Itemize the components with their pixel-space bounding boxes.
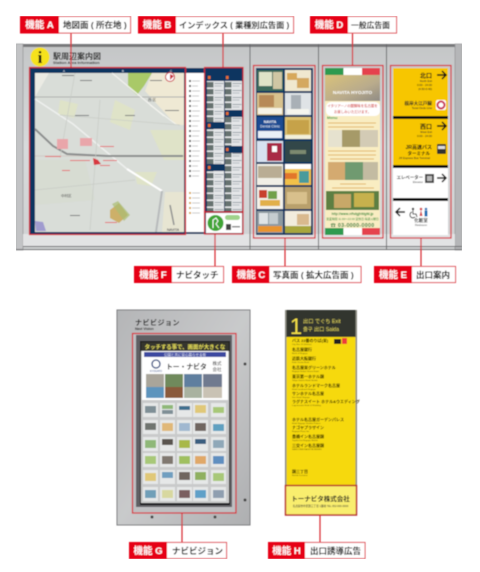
north exit — [417, 71, 446, 91]
highlight: navi touch frame — [204, 212, 243, 234]
exit sign destinations: Hotel Landmark Nagoya — [292, 388, 316, 391]
panel: general ad: イタリアーノの醍醐味を名古屋を — [327, 103, 378, 108]
west exit: 0:00 - 24:00 — [417, 134, 432, 138]
exit sign destinations: バス 22番のりば(栄) — [292, 337, 329, 343]
panel: area map: A — [63, 69, 65, 73]
exit sign destinations: Nagoya Sakae Green Hotel — [292, 370, 319, 373]
panel: exit sign — [285, 310, 360, 515]
north exit: 北口 — [420, 72, 432, 80]
exit sign destinations: Toyoko Inn Nagoya Nishiki — [292, 440, 318, 442]
subway line: 根岸大江戸線 — [404, 100, 432, 107]
elevator: Elevator — [413, 180, 423, 184]
exit sign destinations: 名古屋銀行 — [292, 346, 312, 352]
exit sign destinations: 東京第一ホテル錦 — [292, 373, 324, 379]
screen: navi vision display: タッチする事で、画面が大きくな — [145, 343, 226, 351]
highlight: index frame — [204, 68, 243, 212]
ad: To-Navita: トー・ナビタ — [166, 362, 207, 371]
exit sign destinations: サンホテル名古屋 — [292, 390, 324, 396]
elevator — [397, 174, 446, 184]
callout: feature C: 機能 C — [237, 269, 265, 281]
exit sign destinations: 豊橋イン名古屋錦 — [292, 433, 324, 439]
exit sign destinations: Lagunasuite Hotel & Wedding — [292, 404, 322, 407]
callout: feature B: 機能 B — [143, 19, 171, 31]
restroom — [396, 208, 428, 227]
exit sign destinations: Tokyo Daiichi Hotel Nishiki — [292, 379, 318, 382]
exit sign header: 出口 でぐち Exit — [303, 317, 341, 325]
heading: station area map: 駅周辺案内図 — [53, 51, 101, 61]
callout: feature B — [138, 16, 294, 67]
callout: feature C: 写真面 ( 拡大広告面 ) — [273, 270, 354, 280]
ad: To-Navita: 公園と共に安心暮らせる街 — [164, 352, 206, 357]
panel: exit guide — [393, 68, 448, 235]
callout: feature F: 機能 F — [139, 269, 167, 281]
highlight: navi vision frame — [132, 334, 236, 513]
panel: photo ads: NAVITA — [264, 120, 277, 124]
exit sign destinations — [292, 337, 360, 477]
panel: photo ads — [256, 68, 313, 235]
callout: feature H: 機能 H — [272, 545, 301, 557]
icon: information — [30, 48, 50, 67]
north exit: 0:00 - 24:00 — [417, 83, 432, 87]
panel: area map: 西 区 — [148, 98, 156, 102]
callout: feature F — [134, 234, 224, 283]
ad: To-Navita: KYOUATO — [150, 370, 162, 373]
panel: area map: C — [170, 69, 172, 73]
exit sign header: 1 — [290, 314, 302, 339]
exit sign destinations: Sun Hotel Nagoya — [292, 396, 311, 399]
north exit: (4:50-0:40) — [418, 87, 432, 91]
elevator: エレベーター — [397, 174, 423, 181]
bus terminal: ターミナル — [408, 150, 430, 157]
exit sign ad: トーナビタ株式会社 — [291, 494, 350, 503]
exit sign destinations: ホテルランドマーク名古屋 — [292, 382, 340, 388]
panel: area map: 中村区 — [61, 193, 72, 198]
panel: station wall sign — [16, 44, 462, 250]
panel: general ad: Menu — [327, 115, 338, 120]
west exit: West Exit — [420, 130, 432, 134]
exit sign destinations: ラグナスイート ホテル&ウエディング — [292, 398, 360, 404]
callout: feature F: ナビタッチ — [176, 270, 219, 280]
icon: information: i — [38, 48, 43, 67]
callout: feature E: 出口案内 — [416, 270, 450, 280]
callout: feature H: 出口誘導広告 — [310, 546, 361, 556]
callout: feature D — [310, 16, 396, 65]
exit sign destinations: ホテル名古屋ガーデンパレス — [292, 416, 344, 422]
panel: general ad: http://www.nfhdgjhfdgfd.jp — [332, 212, 373, 216]
exit sign destinations: 錦三丁目 — [292, 468, 308, 474]
west exit — [417, 122, 446, 138]
restroom: Restroom — [415, 223, 428, 227]
callout: feature A: 機能 A — [25, 19, 54, 31]
panel: category ad index — [205, 68, 243, 234]
exit sign destinations: City Bus 22 (Sakae) — [292, 343, 312, 346]
callout: feature A: 地図面 ( 所在地 ) — [63, 20, 127, 30]
ad: To-Navita — [142, 351, 228, 400]
panel: general ad: ☎ 03-0000-0000 — [331, 223, 374, 229]
exit sign destinations: Kinki Osaka Bank — [292, 362, 310, 364]
exit sign destinations: Hotel Nagoya Garden Palace — [292, 422, 321, 425]
panel: general ad: お楽しみいただけます。 — [334, 109, 371, 114]
panel: general ad: NAVITA HYOJITO — [333, 90, 372, 96]
exit sign destinations: SANCOINN NAGOYA NISHIKI — [292, 448, 322, 451]
panel: general ad — [325, 68, 380, 235]
ad: To-Navita: 会社 — [212, 366, 222, 373]
panel: photo ads: Dental Clinic — [260, 124, 280, 128]
highlight: general ad frame — [322, 66, 383, 238]
highlight: exit sign ad frame — [286, 486, 356, 515]
highlight: photo ad frame — [254, 66, 315, 238]
exit sign destinations: 三交イン名古屋錦 — [292, 442, 324, 448]
bus terminal — [399, 144, 446, 160]
west exit: 西口 — [420, 124, 432, 131]
panel: navi vision kiosk — [117, 310, 250, 525]
panel: general ad: 営業時間 11:00〜22:00 定休日:毎週火曜日 — [326, 217, 379, 221]
subway line: Tozai Oedo Line — [412, 106, 432, 110]
exit sign destinations: 名古屋栄グリーンホテル — [292, 364, 336, 370]
callout: feature E: 機能 E — [379, 269, 407, 281]
callout: feature D: 機能 D — [315, 19, 343, 31]
panel: area map: NAVITA — [167, 228, 180, 232]
thumbnail grid — [143, 403, 226, 501]
ad: To-Navita: 株式 — [212, 360, 222, 367]
heading: station area map — [53, 51, 101, 65]
exit sign destinations: Nagoya Plaza Inn — [292, 431, 310, 433]
exit sign header: 출구 出口 Saida — [303, 325, 339, 333]
heading: station area map: Station Area Information — [53, 60, 100, 65]
exit sign destinations: 近鉄大阪銀行 — [292, 355, 316, 361]
panel: area map — [30, 68, 186, 234]
callout: feature B: インデックス ( 業種別広告面 ) — [179, 20, 290, 30]
callout: feature G: ナビビジョン — [172, 546, 223, 556]
callout: feature E — [374, 238, 456, 283]
exit sign ad — [286, 485, 356, 515]
exit sign destinations: ナゴヤプラザイン — [292, 424, 324, 430]
exit sign ad: 名古屋市中区錦三丁目 1番地 TEL 052-000-0000 — [293, 504, 349, 508]
restroom: 化粧室 — [414, 217, 428, 224]
exit sign destinations: Bank of Nagoya — [292, 353, 308, 355]
screen: navi vision display — [133, 334, 235, 512]
highlight: map frame — [30, 68, 186, 234]
callout: feature G — [129, 513, 226, 559]
panel: navi touch — [206, 213, 242, 233]
exit sign destinations: Nishiki 3-chome — [292, 475, 308, 477]
callout: feature A — [20, 16, 130, 68]
bus terminal: JR Express Bus Terminal — [399, 156, 430, 160]
heading: navi vision: ナビビジョン — [135, 318, 180, 327]
highlight: exit guide frame — [390, 66, 451, 238]
subway line — [404, 100, 446, 110]
callout: feature G: 機能 G — [133, 545, 163, 557]
callout: feature D: 一般広告面 — [351, 20, 390, 30]
callout: feature C — [232, 238, 361, 283]
callout: feature H — [268, 515, 365, 559]
heading: navi vision: Navi Vision — [135, 327, 154, 331]
bus terminal: JR高速バス — [406, 144, 432, 151]
north exit: North Exit — [420, 79, 432, 83]
panel: index list — [186, 68, 204, 234]
exit sign header — [290, 314, 341, 339]
panel: area map: B — [122, 69, 124, 73]
heading: navi vision — [135, 318, 180, 331]
